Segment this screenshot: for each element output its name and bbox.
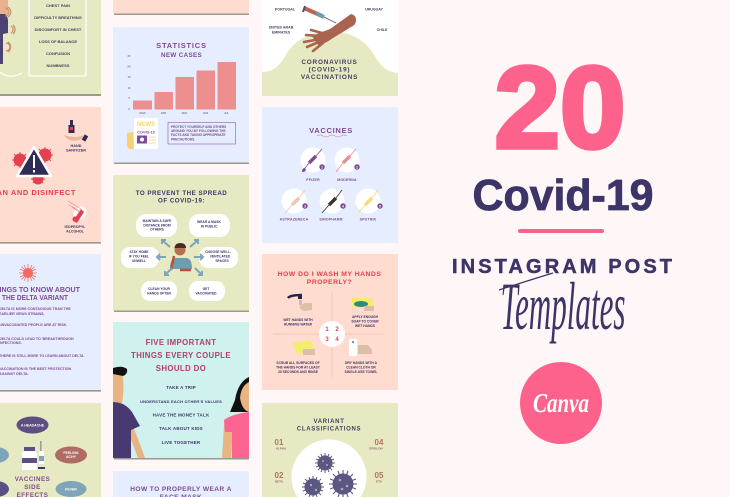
- panel: symptoms card: DIFFICULTY BREATHING: [34, 15, 82, 20]
- heading: delta variant: [0, 287, 81, 302]
- heading: statistics: STATISTICS: [156, 41, 207, 50]
- text: step two: WET HANDS: [355, 324, 376, 328]
- panel: symptoms card: [0, 0, 101, 96]
- icon: scrub: [292, 340, 315, 355]
- icon: virus warning: [12, 147, 53, 184]
- decorative underline: [317, 135, 347, 137]
- label: 01 alpha: [275, 438, 287, 450]
- labels: vaccine names: [280, 178, 377, 222]
- callout: get vaccinated: [189, 281, 225, 301]
- bar chart: 10: [127, 86, 131, 90]
- icon: isopropyl alcohol: [68, 201, 89, 223]
- icon: soap: [352, 298, 374, 311]
- list: things to do: TALK ABOUT KIDS: [159, 426, 203, 431]
- callout: protect yourself: PROTECT YOURSELF AND OTHERS: [171, 125, 226, 129]
- heading: five important things: SHOULD DO: [156, 364, 206, 373]
- list: delta facts: DELTA COULD LEAD TO 'BREAKTHROUGH: [0, 337, 74, 341]
- list: delta facts: [0, 307, 85, 376]
- step numbers circle: 3: [325, 337, 329, 343]
- panel: prevent the spread card: [113, 175, 249, 312]
- illustration: man: [113, 367, 145, 458]
- callout: protect yourself: FACTS AND TAKING APPROPRIATE: [171, 133, 226, 137]
- heading: five important things: THINGS EVERY COUPLE: [131, 351, 231, 360]
- labels: vaccine names: PFIZER: [306, 178, 320, 182]
- step numbers circle: 4: [335, 337, 339, 343]
- panel: variant classifications card: [262, 403, 398, 497]
- heading: new cases: NEW CASES: [161, 52, 202, 59]
- label: isopropyl alcohol: ISOPROPYL: [65, 225, 86, 229]
- panel: clean and disinfect card: [0, 107, 101, 244]
- label: 04 epsilon: [369, 438, 384, 450]
- label: 05 eta: ETA: [376, 480, 383, 484]
- callout: clean hands: CLEAN YOUR: [148, 287, 170, 291]
- labels: vaccine names: SPUTNIK: [360, 218, 377, 222]
- label: 02 beta: BETA: [275, 480, 284, 484]
- label: 02 beta: 02: [275, 471, 284, 480]
- text: step three: 20 SECONDS AND RINSE: [278, 370, 319, 374]
- label: 05 eta: [375, 471, 384, 484]
- text: step two: SOAP TO COVER: [351, 320, 379, 324]
- callout: stay home: [121, 247, 159, 268]
- label: 04 epsilon: EPSILON: [369, 446, 383, 450]
- list: things to do: LIVE TOGETHER: [162, 440, 201, 445]
- icon: vaccine vial and syringe: [22, 441, 45, 470]
- icon: newspaper: NEWS: [137, 122, 155, 128]
- panel: top peach card: [113, 0, 249, 15]
- heading: vaccines side effects: VACCINES: [15, 476, 50, 483]
- callout: feeling achy: [55, 446, 87, 464]
- illustration: green hill: [262, 31, 398, 96]
- callout: feeling achy: FEELING: [63, 451, 79, 455]
- callout: wear a mask: WEAR A MASK: [197, 220, 221, 224]
- icon: Canva badge: Canva: [533, 388, 589, 418]
- illustration: arm and syringe: [303, 6, 356, 51]
- icon: sinopharm: 4: [342, 204, 344, 208]
- label: hand sanitizer: SANITIZER: [66, 148, 86, 152]
- bar chart: 15: [127, 75, 131, 79]
- callout: protect yourself: [168, 122, 236, 144]
- bar chart: APR: [161, 111, 166, 115]
- list: things to do: UNDERSTAND EACH OTHER'S VALUES: [140, 399, 222, 404]
- callout: chills: [0, 481, 9, 497]
- panel: delta variant card: [0, 254, 101, 392]
- bar chart: 5: [128, 96, 130, 100]
- icon: tap: [288, 295, 312, 311]
- label: 04 epsilon: 04: [375, 438, 384, 447]
- bar chart: JUL: [224, 111, 229, 115]
- callout: stay home: STAY HOME: [130, 250, 149, 254]
- labels: countries: URUGUAY: [365, 8, 384, 12]
- panel: couple card: [113, 322, 249, 460]
- bar chart: MAR: [140, 111, 146, 115]
- bar chart: MAY: [182, 111, 188, 115]
- bar chart: [127, 54, 236, 115]
- icon: person coughing: [170, 243, 192, 270]
- panel: wash hands card: [262, 254, 398, 390]
- bar chart: 0: [128, 107, 130, 111]
- label: 01 alpha: 01: [275, 438, 284, 447]
- callout: maintain distance: [136, 214, 177, 237]
- labels: countries: CHILE: [377, 28, 388, 32]
- callout: clean hands: HANDS OFTEN: [147, 292, 172, 296]
- divider cross: [273, 291, 384, 377]
- callout: stay home: IF YOU FEEL: [129, 254, 149, 258]
- step numbers circle: 2: [335, 327, 339, 333]
- panel: symptoms card: NUMBNESS: [47, 63, 70, 68]
- callout: ventilated spaces: [199, 247, 238, 268]
- callout: feeling achy: ACHY: [66, 455, 77, 459]
- script: Templates: [499, 268, 626, 344]
- icon: towel: [349, 339, 372, 356]
- heading: prevent the spread: OF COVID-19:: [158, 198, 205, 204]
- callout: wear a mask: [189, 214, 230, 237]
- label: 05 eta: 05: [375, 471, 384, 480]
- text: step one: WET HANDS WITH: [283, 318, 313, 322]
- callout: fever: FEVER: [65, 488, 77, 492]
- heading: delta variant: THE DELTA VARIANT: [2, 295, 69, 302]
- label: 01 alpha: ALPHA: [276, 446, 287, 450]
- labels: countries: UNITED ARAB: [269, 26, 294, 30]
- bar chart: JUN: [203, 111, 208, 115]
- list: things to do: TAKE A TRIP: [166, 385, 196, 390]
- panel: symptoms card: DISCOMFORT IN CHEST: [35, 27, 82, 32]
- text: step four: CLEAN CLOTH OR: [346, 366, 376, 370]
- text: step four: SINGLE-USE TOWEL: [345, 370, 377, 374]
- list: delta facts: UNVACCINATED PEOPLE ARE AT RISK.: [0, 323, 67, 327]
- callout: a headache: A HEADACHE: [21, 424, 45, 428]
- panel: symptoms card: LOSS OF BALANCE: [39, 39, 77, 44]
- heading: variant classifications: CLASSIFICATIONS: [297, 426, 361, 432]
- panel: face mask card: [113, 471, 249, 497]
- icon: Canva badge: [520, 362, 602, 444]
- white circle with viruses: [292, 440, 366, 497]
- heading: prevent the spread: TO PREVENT THE SPREAD: [136, 190, 227, 197]
- callout: tired: [0, 447, 9, 463]
- panel: statistics card: [113, 27, 249, 164]
- heading: coronavirus vaccinations: VACCINATIONS: [301, 74, 358, 81]
- heading: coronavirus vaccinations: CORONAVIRUS: [301, 59, 358, 66]
- callout: protect yourself: PRECAUTIONS.: [171, 138, 195, 142]
- labels: countries: EMIRATES: [272, 30, 291, 34]
- callout: maintain distance: MAINTAIN A SAFE: [143, 219, 172, 223]
- callout: ventilated spaces: VENTILATED: [210, 254, 231, 258]
- callout: get vaccinated: VACCINATED: [195, 292, 217, 296]
- list: delta facts: EARLIER VIRUS STRAINS.: [0, 312, 45, 316]
- heading: Instagram Post: INSTAGRAM POST: [452, 256, 672, 278]
- callout: wear a mask: IN PUBLIC: [201, 224, 218, 228]
- list: delta facts: DELTA IS MORE CONTAGIOUS THAN THE: [0, 307, 71, 311]
- heading: variant classifications: VARIANT: [313, 419, 345, 425]
- heading: how do I wash my hands: PROPERLY?: [307, 279, 352, 286]
- text: step three: THE HANDS FOR AT LEAST: [276, 366, 320, 370]
- panel: symptoms card: CONFUSION: [46, 51, 70, 56]
- bar chart: 20: [127, 64, 131, 68]
- labels: countries: [269, 8, 388, 34]
- labels: vaccine names: SINOPHARM: [319, 218, 343, 222]
- icon: sputnik: 5: [379, 204, 381, 208]
- label: 02 beta: [275, 471, 284, 484]
- label: isopropyl alcohol: ALCOHOL: [66, 230, 85, 234]
- heading: five important things: FIVE IMPORTANT: [146, 338, 216, 347]
- panel: vaccines card: [262, 107, 398, 243]
- panel: vaccinations card: [262, 0, 398, 96]
- divider underline: [518, 229, 604, 233]
- bar chart: 25: [127, 54, 131, 58]
- callout: protect yourself: AROUND YOU BY FOLLOWING THE: [171, 129, 226, 133]
- step numbers circle: [319, 321, 345, 347]
- callout: ventilated spaces: SPACES: [215, 259, 229, 263]
- panel: vaccines side effects card: [0, 403, 101, 497]
- text: step four: DRY HANDS WITH A: [345, 361, 378, 365]
- labels: vaccine names: MODERNA: [337, 178, 357, 182]
- labels: vaccine names: ASTRAZENECA: [280, 218, 309, 222]
- icon: moderna: 2: [356, 165, 358, 169]
- text: step one: RUNNING WATER: [284, 322, 313, 326]
- icon: newspaper: [127, 118, 158, 149]
- icon: hand sanitizer: [64, 120, 88, 142]
- label: hand sanitizer: HAND: [71, 144, 82, 148]
- list: delta facts: THERE IS STILL MORE TO LEARN ABOUT DELTA.: [0, 354, 85, 358]
- labels: countries: PORTUGAL: [275, 8, 296, 12]
- icon: pfizer: 1: [321, 165, 323, 169]
- callout: get vaccinated: GET: [203, 287, 209, 291]
- callout: maintain distance: OTHERS: [150, 228, 165, 232]
- heading: vaccines: VACCINES: [309, 126, 353, 135]
- icon: newspaper: COVID-19: [137, 130, 155, 134]
- list: things to do: HAVE THE MONEY TALK: [153, 412, 210, 418]
- arrows: prevention directions: [157, 240, 203, 275]
- step numbers circle: 1: [325, 327, 329, 333]
- panel: symptoms card: CHEST PAIN: [46, 3, 70, 8]
- list: things to do: [140, 385, 222, 445]
- heading: how to wear a face mask: HOW TO PROPERLY WEAR A: [130, 486, 232, 493]
- list: delta facts: VACCINATION IS THE BEST PROTECTION: [0, 367, 72, 371]
- text: step two: APPLY ENOUGH: [352, 315, 379, 319]
- text: step three: SCRUB ALL SURFACES OF: [276, 361, 320, 365]
- heading: how do I wash my hands: HOW DO I WASH MY HANDS: [278, 271, 381, 278]
- callout: clean hands: [141, 281, 177, 301]
- illustration: woman: [222, 377, 249, 458]
- heading: coronavirus vaccinations: (COVID-19): [309, 66, 350, 74]
- heading: Covid-19: Covid-19: [472, 171, 654, 220]
- callout: ventilated spaces: CHOOSE WELL-: [205, 250, 231, 254]
- number 20: 20: [494, 42, 626, 172]
- callout: maintain distance: DISTANCE FROM: [143, 223, 171, 227]
- heading: vaccines side effects: SIDE: [24, 484, 41, 491]
- icon: delta virus: [19, 264, 37, 282]
- icon: astrazeneca: 3: [304, 204, 306, 208]
- callout: stay home: UNWELL: [132, 259, 146, 263]
